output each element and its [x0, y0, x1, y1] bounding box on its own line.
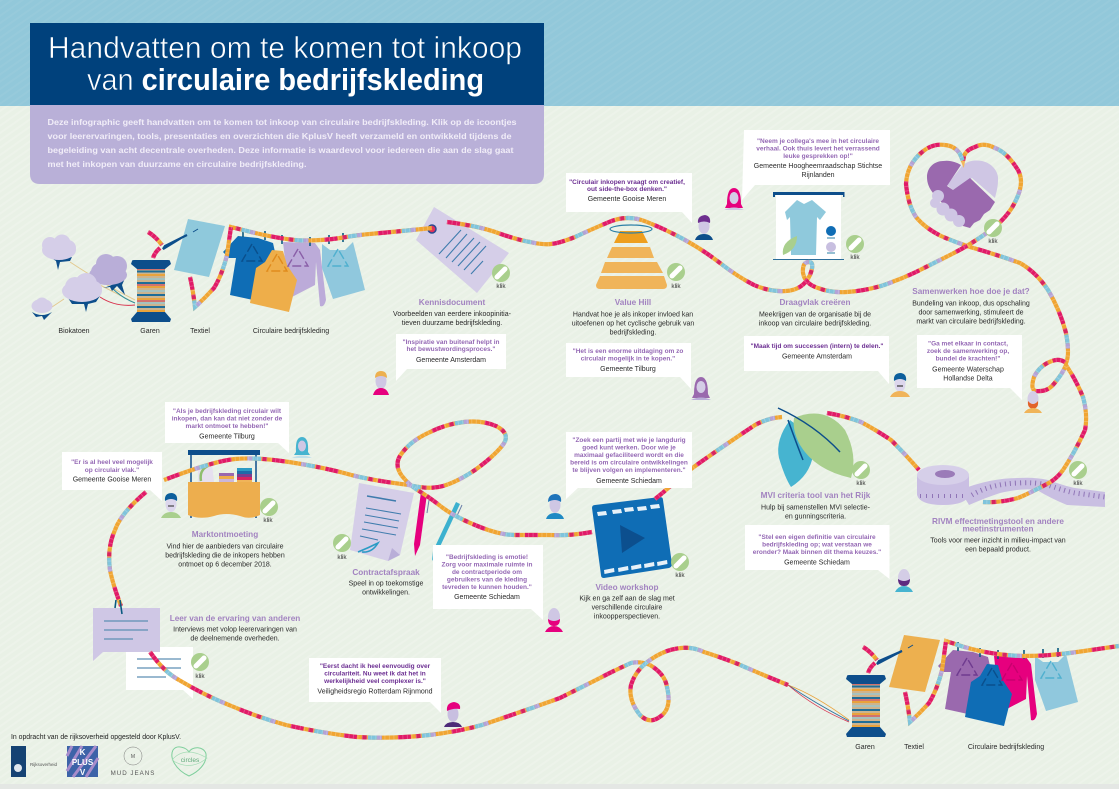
link: value hill: klik: [671, 283, 681, 290]
icon: handshake in heart: [927, 161, 998, 228]
link: leer van anderen: klik: [195, 673, 205, 680]
text: Kennisdocument: [393, 298, 512, 327]
link: rivm: [1069, 461, 1087, 487]
text: Kennisdocument: tieven duurzame bedrijfskleding.: [402, 320, 502, 327]
text: Marktontmoeting: [165, 530, 285, 568]
link: samenwerken: klik: [988, 238, 998, 245]
link: leer van anderen: [191, 653, 209, 680]
text: Value Hill: [572, 298, 694, 336]
quote: Het is een enorme uitdaging: circulair mogelijk in te kopen.": [581, 356, 675, 362]
quote: Circulair inkopen: Gemeente Gooise Meren: [588, 196, 666, 203]
quote: Inspiratie: het bewustwordingsproces.": [406, 346, 496, 353]
text: Video workshop: verschillende circulaire: [592, 604, 663, 612]
icon: video film strip: [592, 497, 672, 578]
quote: Inspiratie: [396, 334, 506, 381]
quote: Bedrijfskleding is emotie: [433, 545, 543, 620]
quote: Neem je collega's: Rijnlanden: [801, 172, 835, 179]
link: value hill: [667, 263, 685, 290]
quote: Eerst dacht ik: circulariteit. Nu weet ik dat het in: [324, 670, 426, 678]
text: Marktontmoeting: Marktontmoeting: [192, 530, 258, 539]
quote: Bedrijfskleding is emotie: gebruikers van de kleding: [447, 576, 527, 584]
quote: Er is al heel veel: "Er is al heel veel mogelijk: [71, 459, 153, 466]
quote: Zoek een partij: goed kunt werken. Door wie je: [582, 444, 676, 452]
label: Textiel: Textiel: [190, 328, 210, 335]
quote: Het is een enorme uitdaging: "Het is een enorme uitdaging om zo: [573, 348, 683, 355]
link: mvi: klik: [856, 480, 866, 487]
logo: Mud Jeans: [111, 747, 155, 777]
text: MVI criteria tool: Hulp bij samenstellen MVI selectie-: [761, 504, 871, 512]
text: Leer van de ervaring: de deelnemende overheden.: [190, 636, 280, 642]
icon: circular clothes on the line, bottom: [938, 642, 1078, 726]
quote: Het is een enorme uitdaging: [566, 343, 691, 389]
quote: Als je bedrijfskleding: "Als je bedrijfskleding circulair wilt: [173, 408, 282, 415]
quote: Er is al heel veel: Gemeente Gooise Meren: [73, 476, 151, 484]
text: RIVM effectmetingstool: [930, 517, 1066, 554]
quote: Ga met elkaar: [917, 335, 1022, 400]
text: Contractafspraak: ontwikkelingen.: [362, 590, 410, 596]
quote: Eerst dacht ik: Veiligheidsregio Rotterdam Rijnmond: [317, 688, 433, 696]
icon: circular clothes on the line: [223, 228, 365, 312]
logo: circles: [172, 747, 207, 776]
person: Amsterdam man with moustache: [890, 373, 910, 397]
quote: Zoek een partij: te blijven volgen en implementeren.": [572, 467, 686, 474]
quote: Circulair inkopen: "Circulair inkopen vraagt om creatief,: [569, 179, 685, 186]
person: Schiedam woman dark hair: [895, 569, 913, 592]
icon: textile sheet with needle, bottom: [877, 635, 940, 692]
text: Kennisdocument: Voorbeelden van eerdere inkoopinitia-: [393, 311, 512, 318]
quote: Als je bedrijfskleding: [165, 402, 289, 453]
logo: KplusV: PLUS: [72, 758, 94, 767]
link: mvi: [852, 461, 870, 487]
quote: Neem je collega's: [742, 130, 890, 200]
text: Value Hill: Handvat hoe je als inkoper invloed kan: [573, 312, 693, 318]
quote: Het is een enorme uitdaging: Gemeente Tilburg: [600, 366, 656, 373]
logo: KplusV: V: [80, 768, 86, 777]
person: Tilburg woman with headscarf: [691, 377, 711, 400]
person: Rotterdam Rijnmond: [444, 702, 462, 727]
text: Contractafspraak: Contractafspraak: [352, 568, 420, 577]
top blue band: [0, 0, 1119, 106]
link: kennisdocument: klik: [496, 283, 506, 290]
icon: MVI leaves: [778, 408, 853, 487]
text: MVI criteria tool: [761, 491, 871, 520]
quote: Neem je collega's: verhaal. Ook thuis levert het verrassend: [756, 146, 880, 152]
label: Biokatoen: Biokatoen: [58, 328, 90, 335]
clip of the speech bubble on the rope: [115, 600, 122, 614]
text: Value Hill: Value Hill: [615, 298, 651, 307]
quote: Als je bedrijfskleding: markt ontmoet te hebben!": [186, 423, 268, 430]
text: Value Hill: uitoefenen op het cyclische gebruik van: [572, 320, 694, 328]
person: Schiedam man: [546, 494, 564, 519]
link: kennisdocument: [492, 264, 510, 290]
quote: Inspiratie: "Inspiratie van buitenaf helpt in: [403, 339, 500, 346]
quote: Maak tijd: [744, 336, 889, 384]
icon: speech bubbles with document lines: [93, 608, 193, 699]
text: Marktontmoeting: ontmoet op 6 december 2018.: [178, 562, 272, 568]
icon: textile sheet with needle: [163, 219, 225, 277]
intro panel: voor leerervaringen, tools, presentaties en overzichten die KplusV heeft verzameld en ontwikkeld tijdens de: [48, 131, 512, 141]
quote: Circulair inkopen: [566, 173, 692, 223]
logo: KplusV: [67, 746, 98, 777]
link: contractafspraak: [333, 534, 351, 561]
text: Leer van de ervaring: Interviews met volop leerervaringen van: [173, 626, 297, 634]
quote: Eerst dacht ik: "Eerst dacht ik heel eenvoudig over: [320, 663, 431, 670]
text: Marktontmoeting: bedrijfskleding die de inkopers hebben: [165, 552, 285, 560]
logo: Rijksoverheid: Rijksoverheid: [30, 762, 58, 767]
logo: Mud Jeans: M: [131, 754, 135, 760]
quote: Bedrijfskleding is emotie: de contractperiode om: [452, 569, 522, 576]
quote: Maak tijd: "Maak tijd om successen (intern) te delen.": [751, 343, 883, 350]
text: MVI criteria tool: en gunningscriteria.: [785, 514, 846, 520]
quote: Ga met elkaar: zoek de samenwerking op,: [927, 348, 1009, 355]
title: van circulaire bedrijfskleding: [87, 62, 484, 97]
icon: value hill pyramid: [596, 225, 667, 289]
text: Video workshop: Kijk en ga zelf aan de slag met: [579, 596, 675, 602]
link: rivm: klik: [1073, 480, 1083, 487]
logo: Rijksoverheid: [11, 746, 58, 777]
quote: Bedrijfskleding is emotie: "Bedrijfskleding is emotie!: [446, 554, 528, 561]
quote: Eerst dacht ik: [309, 658, 441, 713]
quote: Er is al heel veel: op circulair vlak.": [85, 467, 139, 474]
quote: Eerst dacht ik: werkelijkheid veel complexer is.": [323, 678, 426, 685]
quote: Ga met elkaar: Hollandse Delta: [943, 376, 993, 382]
quote: Bedrijfskleding is emotie: Gemeente Schiedam: [454, 594, 520, 601]
text: Contractafspraak: Speel in op toekomstige: [349, 580, 423, 588]
text: MVI criteria tool: MVI criteria tool van het Rijk: [761, 491, 871, 500]
link: draagvlak: klik: [850, 254, 860, 261]
link: video workshop: [671, 553, 689, 579]
quote: Stel een eigen definitie: [745, 525, 890, 579]
text: Samenwerken hoe doe je dat?: [912, 287, 1030, 326]
text: RIVM effectmetingstool: meetinstrumenten: [963, 524, 1033, 534]
intro panel: Deze infographic geeft handvatten om te komen tot inkoop van circulaire bedrijfskleding. Klik op de icoontjes: [48, 117, 517, 127]
text: Leer van de ervaring: Leer van de ervaring van anderen: [170, 614, 300, 623]
text: RIVM effectmetingstool: RIVM effectmetingstool en andere: [932, 517, 1064, 526]
intro panel: [30, 105, 544, 184]
person: Stichtse Rijnlanden woman with headscarf: [724, 188, 744, 210]
link: marktontmoeting: klik: [263, 517, 273, 524]
text: RIVM effectmetingstool: een bepaald product.: [965, 546, 1031, 554]
label: Circulaire bedrijfskleding bottom: Circulaire bedrijfskleding: [968, 744, 1044, 751]
person: Gooise Meren man green shirt: [161, 493, 181, 518]
icon: label tag: [416, 207, 509, 293]
logo: Mud Jeans: MUD JEANS: [111, 770, 155, 777]
yarn threads to bottom spool: [788, 685, 849, 722]
icon: presentation board with shirt: [773, 192, 844, 260]
text: Draagvlak creëren: [759, 298, 871, 328]
label: Garen: Garen: [140, 328, 160, 335]
quote: Zoek een partij: "Zoek een partij met wie je langdurig: [572, 437, 686, 444]
yarn rope running through the whole infographic: [109, 145, 1119, 738]
footer credit: In opdracht van de rijksoverheid opgesteld door KplusV.: [11, 734, 181, 741]
text: Samenwerken hoe doe je dat?: Samenwerken hoe doe je dat?: [912, 287, 1030, 296]
icon: spool of yarn: [131, 260, 171, 322]
quote: Als je bedrijfskleding: Gemeente Tilburg: [199, 434, 255, 440]
person: Hollandse Delta: [1024, 391, 1042, 413]
text: Video workshop: Video workshop: [595, 583, 659, 592]
text: Kennisdocument: Kennisdocument: [419, 298, 485, 307]
icon: measuring tape: [917, 465, 1105, 507]
text: Samenwerken hoe doe je dat?: markt van circulaire bedrijfskleding.: [916, 318, 1026, 326]
label: Textiel bottom: Textiel: [904, 744, 924, 751]
link: marktontmoeting: [260, 498, 278, 524]
quote: Stel een eigen definitie: Gemeente Schiedam: [784, 560, 850, 566]
text: RIVM effectmetingstool: Tools voor meer inzicht in milieu-impact van: [930, 538, 1066, 544]
quote: Neem je collega's: Gemeente Hoogheemraadschap Stichtse: [754, 163, 882, 170]
quote: Maak tijd: Gemeente Amsterdam: [782, 354, 852, 360]
quote: Ga met elkaar: "Ga met elkaar in contact,: [928, 340, 1008, 348]
quote: Stel een eigen definitie: eronder? Maak binnen dit thema keuzes.": [753, 549, 881, 556]
text: Samenwerken hoe doe je dat?: Bundeling van inkoop, dus opschaling: [912, 300, 1030, 308]
text: Video workshop: [579, 583, 675, 620]
quote: Ga met elkaar: Gemeente Waterschap: [932, 366, 1004, 374]
quote: Circulair inkopen: out side-the-box denken.": [587, 186, 667, 193]
quote: Neem je collega's: leuke gesprekken op!": [783, 153, 853, 160]
text: Video workshop: inkoopperspectieven.: [594, 614, 660, 620]
quote: Bedrijfskleding is emotie: tevreden te kunnen houden.": [442, 584, 532, 591]
text: Value Hill: bedrijfskleding.: [610, 330, 656, 336]
title: Handvatten om te komen tot inkoop: [48, 30, 522, 65]
person: Gooise Meren man: [695, 215, 713, 240]
text: Draagvlak creëren: Draagvlak creëren: [779, 298, 851, 307]
quote: Zoek een partij: maximaal gefaciliteerd wordt en die: [574, 452, 684, 459]
link: draagvlak: [846, 235, 864, 261]
label: Circulaire bedrijfskleding: Circulaire bedrijfskleding: [253, 328, 329, 335]
logo: circles: circles: [181, 757, 200, 764]
quote: Neem je collega's: "Neem je collega's mee in het circulaire: [757, 138, 879, 145]
title: [30, 23, 544, 105]
quote: Zoek een partij: bereid is om circulaire ontwikkelingen: [570, 460, 688, 466]
quote: Zoek een partij: Gemeente Schiedam: [596, 478, 662, 485]
logo: KplusV: K: [80, 748, 86, 757]
icon: cotton plants: [32, 234, 135, 320]
label: Garen bottom: Garen: [855, 744, 875, 751]
link: contractafspraak: klik: [337, 554, 347, 561]
person: Amsterdam, orange hair: [373, 371, 389, 395]
text: Samenwerken hoe doe je dat?: door samenwerking, stimuleert de: [918, 310, 1024, 316]
person: Schiedam woman: [545, 608, 563, 632]
intro panel: begeleiding van acht decentrale overheden. Deze informatie is waardevol voor iedereen die aan de slag gaat: [48, 145, 514, 155]
link: samenwerken: [984, 219, 1002, 245]
bottom grey band: [0, 784, 1119, 789]
quote: Inspiratie: Gemeente Amsterdam: [416, 357, 486, 364]
text: Draagvlak creëren: inkoop van circulaire bedrijfskleding.: [759, 320, 871, 328]
quote: Er is al heel veel: [62, 452, 162, 501]
quote: Stel een eigen definitie: "Stel een eigen definitie van circulaire: [758, 534, 876, 541]
intro panel: met het inkopen van duurzame en circulaire bedrijfskleding.: [48, 159, 306, 169]
text: Leer van de ervaring: [170, 614, 300, 642]
quote: Zoek een partij: [566, 432, 692, 499]
icon: spool of yarn, bottom: [846, 675, 886, 737]
quote: Stel een eigen definitie: bedrijfskleding op; wat verstaan we: [762, 542, 872, 548]
icon: contract with pens: [350, 483, 462, 561]
quote: Bedrijfskleding is emotie: Zorg voor maximale ruimte in: [441, 562, 533, 568]
text: Contractafspraak: [349, 568, 423, 596]
text: Marktontmoeting: Vind hier de aanbieders van circulaire: [166, 544, 284, 550]
quote: Als je bedrijfskleding: inkopen, dan kan dat niet zonder de: [172, 416, 283, 422]
icon: market stall: [188, 450, 260, 518]
link: video workshop: klik: [675, 572, 685, 579]
person: Tilburg woman blue scarf: [292, 437, 312, 458]
text: Draagvlak creëren: Meekrijgen van de organisatie bij de: [759, 312, 871, 318]
quote: Ga met elkaar: bundel de krachten!": [936, 356, 1000, 362]
